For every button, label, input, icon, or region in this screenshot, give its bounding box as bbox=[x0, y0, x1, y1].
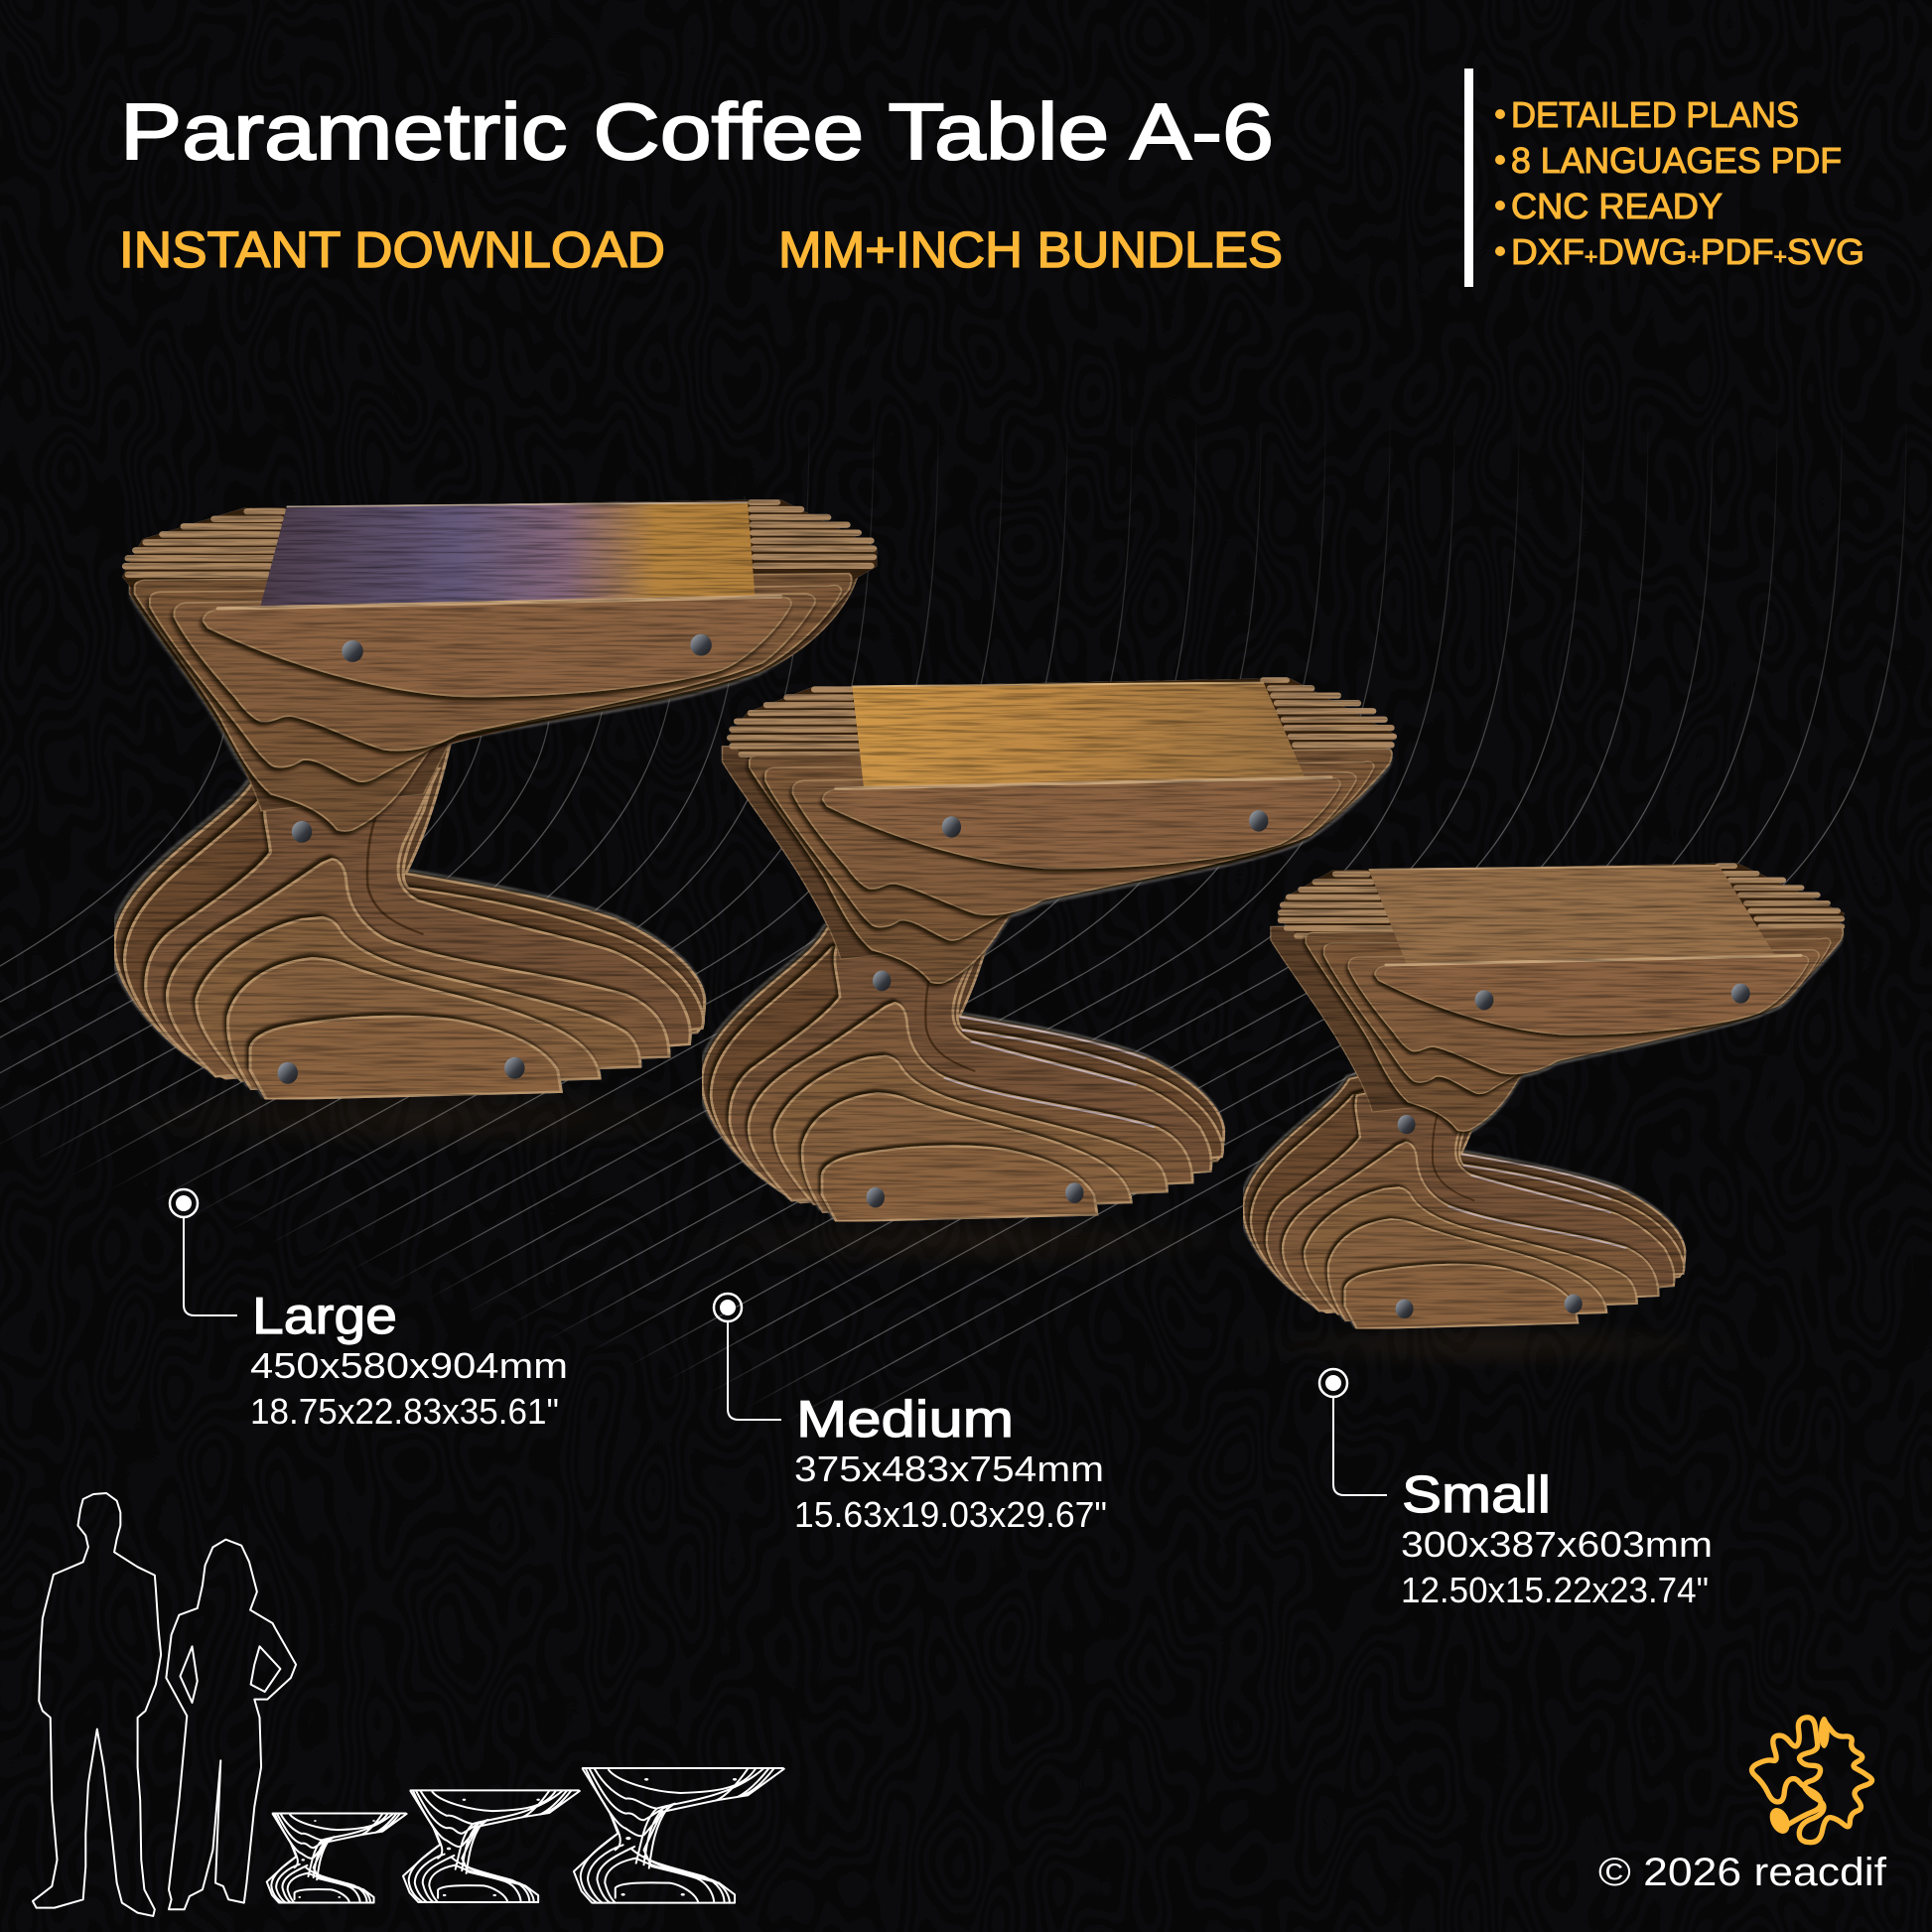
callout: small: 12.50x15.22x23.74" bbox=[1401, 1570, 1709, 1610]
woman silhouette bbox=[166, 1540, 296, 1909]
small table slats bbox=[1278, 863, 1845, 956]
man silhouette bbox=[33, 1493, 161, 1916]
large table bolts bbox=[278, 634, 712, 1084]
callout: medium bbox=[714, 1294, 1107, 1535]
feature list: CNC READY bbox=[1511, 186, 1723, 226]
subtitle: mm and inch bundles: MM+INCH BUNDLES bbox=[778, 221, 1283, 278]
table outline: small bbox=[267, 1814, 407, 1902]
callout: large: 18.75x22.83x35.61" bbox=[250, 1391, 559, 1432]
large table bbox=[114, 499, 877, 1099]
callout: small: 300x387x603mm bbox=[1401, 1524, 1713, 1565]
feature list bbox=[1495, 94, 1864, 272]
medium table bolts bbox=[867, 810, 1268, 1207]
medium table slats bbox=[727, 677, 1397, 778]
callout: large: Large bbox=[252, 1288, 397, 1345]
callout: small bbox=[1319, 1369, 1713, 1610]
callout: small: Small bbox=[1402, 1466, 1551, 1524]
callout: medium: Medium bbox=[796, 1391, 1014, 1449]
logo bbox=[1752, 1717, 1872, 1843]
medium table top surface bbox=[852, 683, 1308, 794]
large table top surface bbox=[259, 502, 756, 613]
feature list: DETAILED PLANS bbox=[1511, 94, 1799, 135]
table outline: medium bbox=[403, 1790, 580, 1902]
background: fan of thin curved lines bbox=[0, 449, 1906, 1430]
large table slats bbox=[122, 499, 877, 611]
feature list: 8 LANGUAGES PDF bbox=[1511, 140, 1842, 181]
feature list: DXF+DWG+PDF+SVG bbox=[1511, 231, 1864, 272]
scale comparison line drawing bbox=[33, 1493, 784, 1916]
copyright: © 2026 reacdif bbox=[1598, 1851, 1887, 1894]
small table bolts bbox=[1396, 984, 1750, 1318]
title: Parametric Coffee Table A-6 bbox=[120, 87, 1274, 176]
table outline: large bbox=[574, 1768, 784, 1903]
medium table bbox=[702, 677, 1397, 1221]
callout: medium: 15.63x19.03x29.67" bbox=[794, 1494, 1107, 1535]
small table bbox=[1243, 863, 1845, 1328]
small table top surface bbox=[1369, 866, 1780, 971]
callout: medium: 375x483x754mm bbox=[794, 1449, 1104, 1489]
subtitle: instant download: INSTANT DOWNLOAD bbox=[119, 221, 665, 278]
callout: large: 450x580x904mm bbox=[250, 1345, 568, 1386]
callout: large bbox=[170, 1189, 568, 1432]
floor glow under tables bbox=[79, 1081, 1747, 1371]
vertical divider bbox=[1464, 69, 1473, 287]
